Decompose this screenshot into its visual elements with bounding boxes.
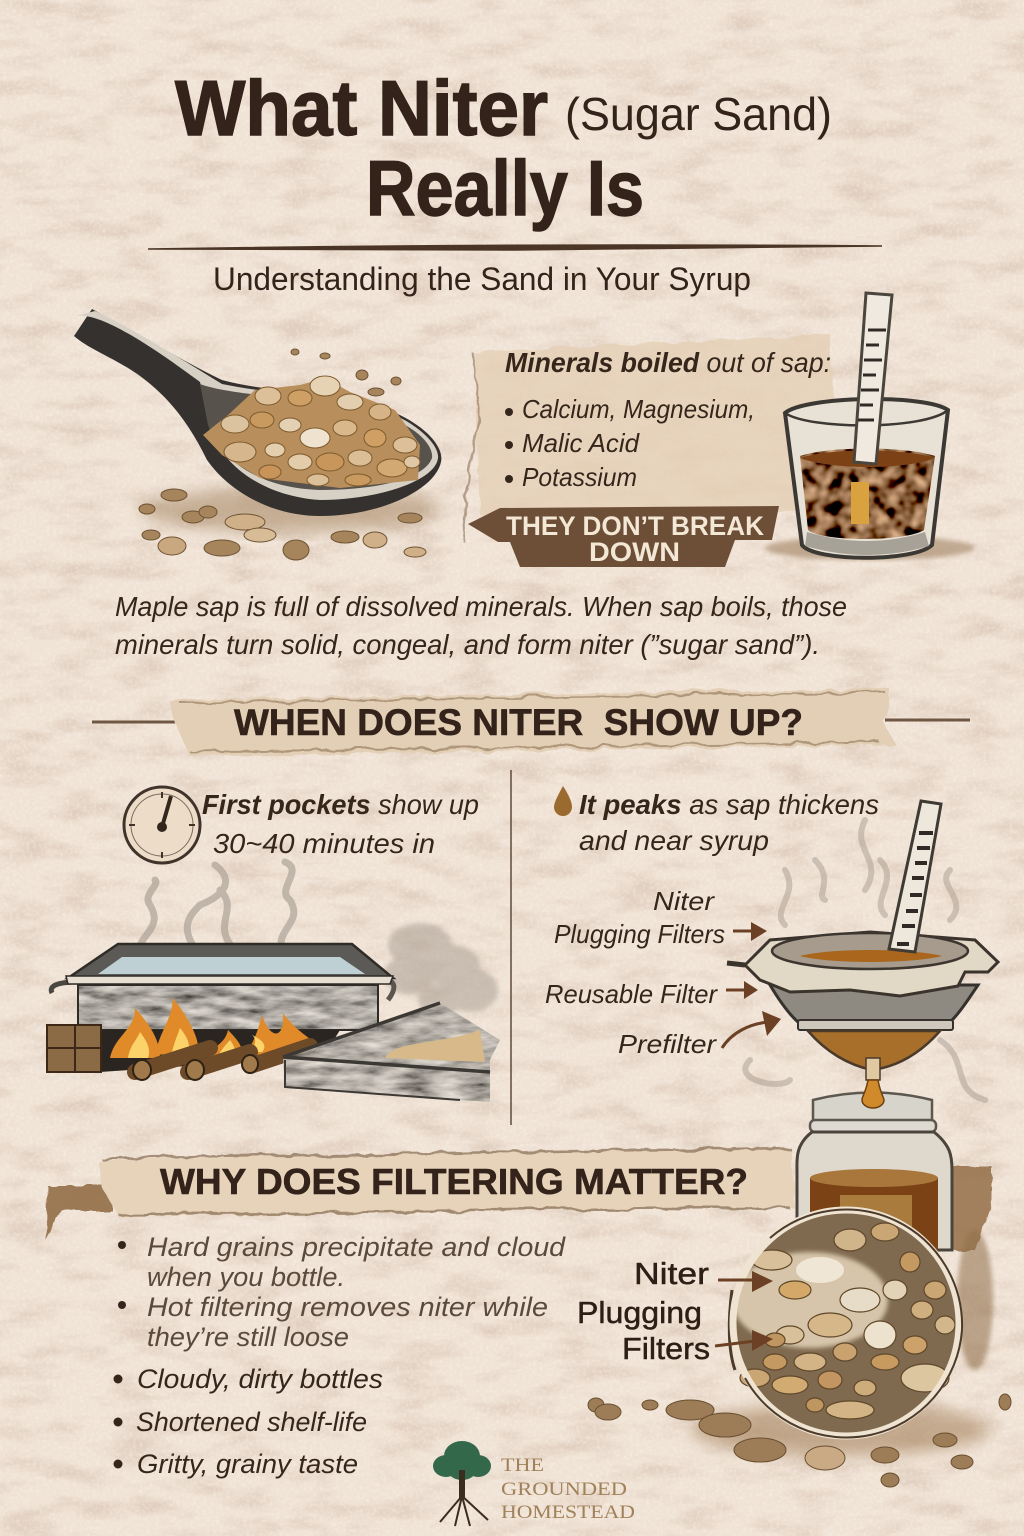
title: (Sugar Sand) xyxy=(565,88,832,140)
banner: they don't break down xyxy=(468,506,779,567)
illustration: filter funnel xyxy=(727,801,998,1100)
magnified niter circle xyxy=(588,1210,1011,1487)
illustration: spoon of niter xyxy=(74,309,441,560)
illustration: syrup jar xyxy=(797,1092,952,1252)
arrows xyxy=(722,931,768,1048)
section banner: when does niter show up xyxy=(92,688,970,756)
divider xyxy=(510,770,512,1125)
title: Really Is xyxy=(366,144,644,232)
banner: they don't break down: DOWN xyxy=(589,537,680,567)
filter labels: Prefilter xyxy=(618,1029,717,1059)
explanation text xyxy=(115,591,847,660)
bullet list: when you bottle. xyxy=(147,1262,345,1292)
logo: GROUNDED xyxy=(501,1479,627,1500)
text: it peaks xyxy=(554,786,879,856)
minerals list: Potassium xyxy=(522,462,637,492)
icon: tree xyxy=(433,1441,491,1526)
icon: clock xyxy=(124,787,200,863)
second tray xyxy=(283,1003,500,1102)
bullet list: they’re still loose xyxy=(147,1322,349,1352)
fire xyxy=(110,998,315,1060)
minerals list: Calcium, Magnesium, xyxy=(522,394,755,424)
bullet list: Hot filtering removes niter while xyxy=(147,1292,548,1322)
illustration: boiling pan over fire xyxy=(47,862,500,1102)
niter pile in spoon xyxy=(203,378,420,488)
circle labels: Plugging xyxy=(577,1295,702,1330)
explanation text: Maple sap is full of dissolved minerals. When sap boils, those xyxy=(115,591,847,622)
text: it peaks: and near syrup xyxy=(579,825,769,856)
bullet list: Cloudy, dirty bottles xyxy=(137,1364,383,1394)
section banner: why does filtering matter xyxy=(97,1148,795,1216)
bullet list: Shortened shelf-life xyxy=(136,1407,367,1437)
text: first pockets: First pockets show up xyxy=(202,789,479,820)
panel: minerals xyxy=(462,334,842,540)
minerals list xyxy=(505,394,755,492)
bullet list xyxy=(114,1232,566,1479)
circle labels xyxy=(577,1256,773,1366)
minerals heading: Minerals boiled out of sap: xyxy=(505,347,831,378)
filter labels: Niter xyxy=(653,886,715,916)
title: What Niter xyxy=(175,64,548,152)
subtitle: Understanding the Sand in Your Syrup xyxy=(213,261,751,297)
banner: they don't break down: THEY DON’T BREAK xyxy=(506,511,764,541)
text: first pockets xyxy=(202,789,479,859)
steam xyxy=(139,862,294,960)
filter labels xyxy=(545,886,781,1059)
icon: syrup droplet xyxy=(862,1080,884,1108)
smoke xyxy=(384,923,498,1016)
circle labels: Niter xyxy=(634,1256,709,1291)
logo text: THE xyxy=(501,1455,544,1476)
lower section torn edges xyxy=(46,1166,992,1250)
filter labels: Reusable Filter xyxy=(545,979,718,1009)
scattered grains xyxy=(139,349,426,560)
explanation text: minerals turn solid, congeal, and form niter (”sugar sand”). xyxy=(115,629,820,660)
circle labels: Filters xyxy=(622,1331,710,1366)
section banner: why does filtering matter: WHY DOES FILTERING MATTER? xyxy=(160,1161,748,1202)
logo xyxy=(433,1441,635,1526)
title rule xyxy=(148,245,882,250)
bullet list: Gritty, grainy taste xyxy=(137,1449,358,1479)
text: first pockets: 30~40 minutes in xyxy=(213,828,435,859)
illustration: glass with thermometer xyxy=(765,293,975,560)
section banner: when does niter show up: WHEN DOES NITER SHOW UP? xyxy=(234,702,803,743)
minerals list: Malic Acid xyxy=(522,428,641,458)
icon: syrup drop xyxy=(554,786,572,816)
text: it peaks: It peaks as sap thickens xyxy=(579,789,879,820)
arrows xyxy=(715,1280,755,1346)
bullet list: Hard grains precipitate and cloud xyxy=(147,1232,566,1262)
filter labels: Plugging Filters xyxy=(554,919,725,949)
logo: HOMESTEAD xyxy=(501,1502,635,1523)
title xyxy=(175,64,832,232)
